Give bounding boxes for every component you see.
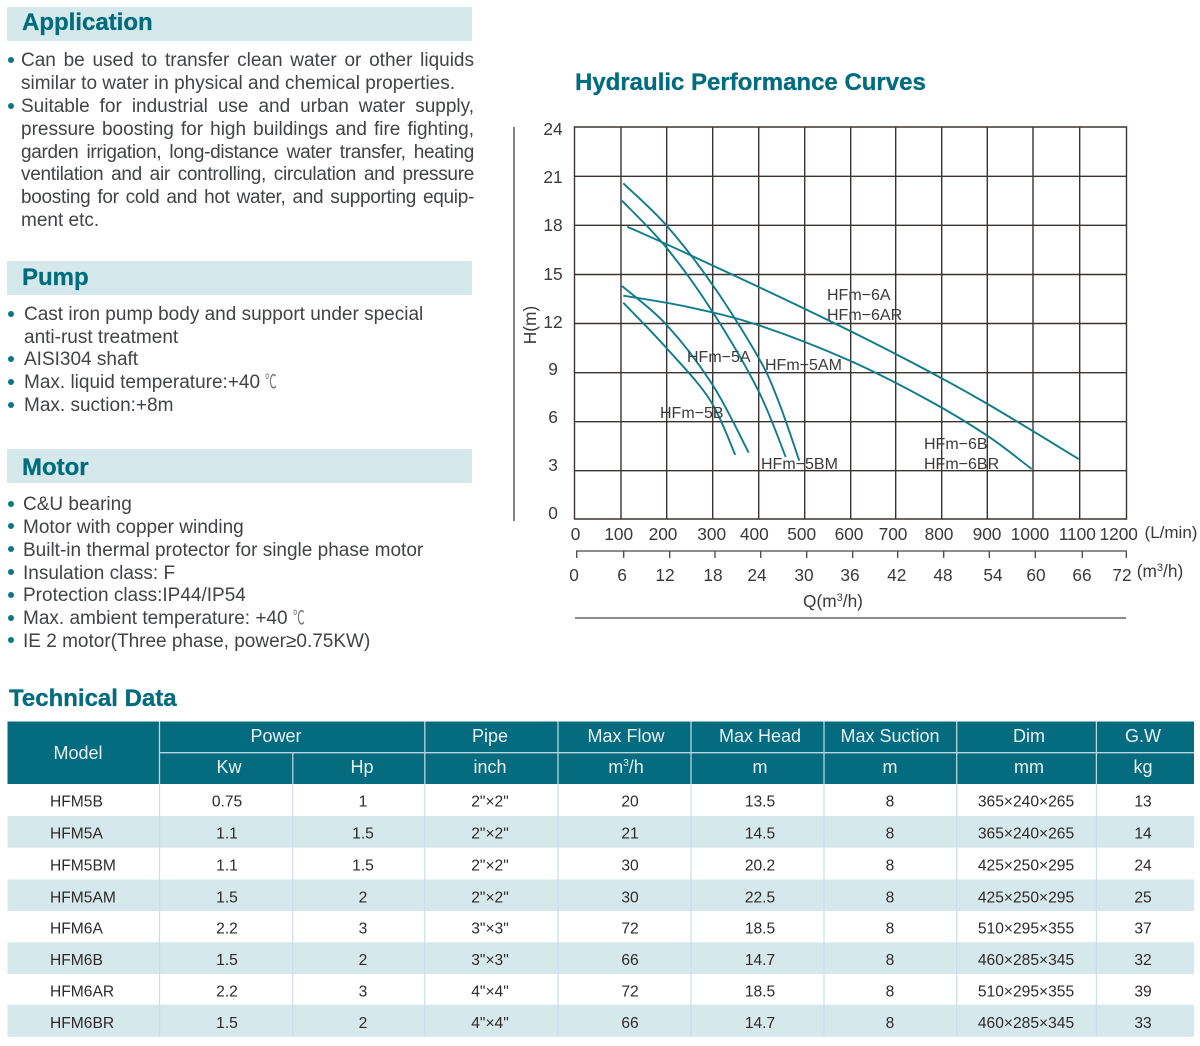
table header: inch (473, 757, 507, 777)
row HFM5AM: 2"×2" (471, 890, 509, 906)
motor bullet list: Max. ambient temperature: +40 (23, 608, 288, 629)
motor bullet list: Protection class:IP44/IP54 (23, 585, 246, 606)
x axis title: 3 (837, 592, 843, 604)
row HFM5A: 8 (886, 826, 894, 842)
table header: Model (53, 743, 103, 763)
application bullet list: similar to water in physical and chemical properties. (21, 73, 455, 94)
row HFM5BM: 8 (886, 858, 894, 874)
row HFM5B: 1 (359, 794, 367, 810)
application bullet list: Suitable for industrial use and urban water supply, (21, 96, 474, 117)
heading: Application: Application (22, 9, 153, 36)
row HFM5BM: 1.1 (216, 858, 238, 874)
x axis labels L/min: 900 (973, 524, 1001, 544)
row HFM5AM: 2 (359, 890, 367, 906)
motor bullet list: C&U bearing (23, 494, 132, 515)
row HFM6BR: 33 (1134, 1015, 1152, 1032)
application bullet list: boosting for cold and hot water, and supporting equip- (21, 187, 474, 208)
table header: Max Flow (587, 726, 666, 746)
y axis tick labels: 15 (543, 264, 563, 284)
row HFM5BM: 24 (1134, 858, 1152, 874)
heading: Hydraulic Performance Curves: Hydraulic Performance Curves (575, 69, 926, 96)
row HFM6A: HFM6A (50, 920, 103, 938)
table row stripes (8, 816, 1194, 1037)
row HFM5B (50, 794, 1152, 810)
row HFM6B: 14.7 (745, 952, 775, 969)
row HFM5BM: 20.2 (745, 858, 775, 874)
x axis title: /h) (843, 591, 863, 611)
row HFM6B: 8 (886, 952, 894, 969)
motor heading bar (7, 449, 472, 483)
x axis labels L/min: 300 (697, 524, 726, 544)
row HFM6B: 66 (621, 952, 639, 969)
table header: Max Suction (840, 726, 940, 746)
panel: application (7, 7, 474, 231)
row HFM6AR (50, 984, 1152, 1000)
row HFM5A: 2"×2" (471, 826, 509, 842)
row HFM5A: HFM5A (50, 826, 103, 842)
table header: m (752, 757, 768, 777)
x axis labels L/min: (L/min) (1145, 523, 1197, 542)
heading: Motor: Motor (22, 454, 89, 481)
table header: Kw (216, 757, 242, 777)
pump heading bar (7, 261, 472, 295)
x axis labels m3/h: 18 (703, 565, 723, 585)
y axis tick labels: 3 (548, 455, 558, 475)
pump bullet list: Max. suction:+8m (24, 395, 173, 416)
row HFM5BM (50, 858, 1152, 874)
curve labels (660, 287, 999, 473)
row HFM6A: 72 (621, 920, 639, 938)
table header: Hp (350, 757, 374, 777)
x axis labels L/min: 1000 (1011, 524, 1049, 544)
row HFM5A: 1.5 (352, 826, 374, 842)
x axis labels L/min (571, 523, 1197, 544)
x axis labels m3/h: 6 (617, 565, 627, 585)
y axis tick labels (543, 119, 563, 523)
table header: Pipe (472, 726, 508, 746)
row HFM5B: 13.5 (745, 794, 775, 810)
x axis labels L/min: 1200 (1099, 524, 1138, 544)
table header: Dim (1013, 726, 1045, 746)
row HFM6B: 32 (1134, 952, 1152, 969)
row HFM5AM: HFM5AM (50, 890, 116, 906)
row HFM5AM: 1.5 (216, 890, 238, 906)
y axis tick labels: 9 (548, 359, 558, 379)
row HFM5BM: 1.5 (352, 858, 374, 874)
x axis labels m3/h: 30 (794, 565, 814, 585)
row HFM5B: 8 (886, 794, 894, 810)
curve labels: HFm−5B (660, 405, 724, 422)
row HFM5BM: 425×250×295 (978, 858, 1074, 874)
row HFM6AR: 4"×4" (471, 984, 509, 1000)
motor bullet list: Motor with copper winding (23, 517, 244, 538)
curve labels: HFm−6AR (827, 307, 902, 324)
table header: 3 (623, 758, 629, 769)
row HFM5A: 21 (621, 826, 639, 842)
row HFM5AM: 30 (621, 890, 639, 906)
row HFM6B: 2 (359, 952, 367, 969)
motor bullet list: Built-in thermal protector for single phase motor (23, 540, 423, 561)
application bullet list (8, 50, 474, 231)
row HFM6AR: 8 (886, 984, 894, 1000)
row HFM5AM: 8 (886, 890, 894, 906)
pump bullet list: anti-rust treatment (24, 327, 178, 348)
y axis tick labels: 18 (543, 215, 563, 235)
x axis labels L/min: 800 (925, 524, 953, 544)
x axis labels m3/h: 36 (840, 565, 860, 585)
row HFM6BR: 1.5 (216, 1015, 238, 1032)
row HFM6BR: HFM6BR (50, 1015, 114, 1032)
curve labels: HFm−6BR (924, 456, 999, 473)
x axis labels L/min: 400 (740, 524, 769, 544)
x axis labels m3/h: /h) (1163, 561, 1183, 581)
x axis labels m3/h: 24 (747, 565, 767, 585)
x axis labels L/min: 600 (835, 524, 863, 544)
row HFM6BR: 460×285×345 (978, 1015, 1074, 1032)
row HFM5AM: 25 (1134, 890, 1152, 906)
y axis title: H(m) (520, 306, 540, 344)
curve labels: HFm−6B (924, 436, 988, 453)
row HFM5B: 0.75 (212, 794, 242, 810)
x axis labels m3/h: 0 (569, 565, 579, 585)
row HFM6A: 37 (1134, 920, 1152, 938)
application heading bar (7, 7, 472, 41)
table header (8, 722, 1194, 784)
heading: Pump: Pump (22, 264, 89, 291)
pump bullet list: ℃ (265, 372, 277, 393)
row HFM6BR: 4"×4" (471, 1015, 509, 1032)
x axis labels L/min: 700 (879, 524, 907, 544)
panel: pump (7, 261, 472, 416)
row HFM6AR: 3 (359, 984, 367, 1000)
table header: mm (1014, 757, 1044, 777)
pump bullet list (8, 304, 423, 416)
row HFM6A (50, 920, 1152, 938)
application bullet list: ventilation and air controlling, circulation and pressure (21, 164, 474, 185)
row HFM6AR: 510×295×355 (978, 984, 1074, 1000)
row HFM5A: 14.5 (745, 826, 775, 842)
row HFM5B: 2"×2" (471, 794, 509, 810)
x axis labels m3/h: 66 (1072, 565, 1092, 585)
curve labels: HFm−6A (827, 287, 891, 304)
x axis labels m3/h (569, 561, 1183, 585)
table header: Power (250, 726, 302, 746)
table header: /h (629, 757, 644, 777)
m3/h ruler (577, 551, 1126, 558)
x axis labels L/min: 100 (604, 524, 633, 544)
row HFM6AR: 2.2 (216, 984, 238, 1000)
row HFM6B: 1.5 (216, 952, 238, 969)
row HFM6A: 18.5 (745, 920, 775, 938)
x axis labels m3/h: 48 (933, 565, 953, 585)
y axis tick labels: 21 (543, 167, 563, 187)
x axis title: Q(m (803, 591, 837, 611)
row HFM6BR (50, 1015, 1152, 1032)
row HFM6BR: 66 (621, 1015, 639, 1032)
y axis tick labels: 0 (548, 503, 558, 523)
row HFM5AM (50, 890, 1152, 906)
row HFM5BM: 2"×2" (471, 858, 509, 874)
x axis labels m3/h: 54 (983, 565, 1003, 585)
row HFM6AR: 18.5 (745, 984, 775, 1000)
row HFM6A: 2.2 (216, 920, 238, 938)
row HFM5B: HFM5B (50, 794, 103, 810)
row HFM5BM: HFM5BM (50, 858, 116, 874)
row HFM6B: 460×285×345 (978, 952, 1074, 969)
row HFM6B: HFM6B (50, 952, 103, 969)
application bullet list: garden irrigation, long-distance water transfer, heating (21, 142, 474, 163)
performance curves (622, 183, 1079, 469)
row HFM5A: 365×240×265 (978, 826, 1074, 842)
row HFM6BR: 14.7 (745, 1015, 775, 1032)
motor bullet list: ℃ (293, 608, 305, 629)
x axis labels m3/h: 12 (655, 565, 675, 585)
pump bullet list: Max. liquid temperature:+40 (24, 372, 260, 393)
row HFM6BR: 8 (886, 1015, 894, 1032)
row HFM6AR: 72 (621, 984, 639, 1000)
row HFM5B: 20 (621, 794, 639, 810)
x axis labels L/min: 500 (787, 524, 816, 544)
table header: kg (1133, 757, 1153, 777)
row HFM5AM: 22.5 (745, 890, 775, 906)
row HFM5B: 365×240×265 (978, 794, 1074, 810)
x axis labels m3/h: 60 (1026, 565, 1046, 585)
x axis labels m3/h: 72 (1112, 565, 1132, 585)
pump bullet list: Cast iron pump body and support under special (24, 304, 423, 325)
panel: motor (7, 449, 472, 652)
application bullet list: pressure boosting for high buildings and fire fighting, (21, 119, 474, 140)
table header: G.W (1125, 726, 1161, 746)
pump bullet list: AISI304 shaft (24, 349, 138, 370)
row HFM6B: 3"×3" (471, 952, 509, 969)
curve labels: HFm−5BM (761, 456, 838, 473)
table header: Max Head (719, 726, 801, 746)
row HFM6BR: 2 (359, 1015, 367, 1032)
curve labels: HFm−5A (687, 349, 751, 366)
x axis labels m3/h: (m (1137, 561, 1157, 581)
row HFM6A: 3"×3" (471, 920, 509, 938)
x axis labels m3/h: 3 (1157, 562, 1163, 574)
application bullet list: Can be used to transfer clean water or other liquids (21, 50, 474, 71)
row HFM6AR: 39 (1134, 984, 1152, 1000)
heading: Technical Data: Technical Data (9, 685, 177, 712)
motor bullet list (8, 494, 423, 652)
table header: m (608, 757, 623, 777)
y axis tick labels: 6 (548, 407, 558, 427)
row HFM5A: 1.1 (216, 826, 238, 842)
row HFM5BM: 30 (621, 858, 639, 874)
row HFM6AR: HFM6AR (50, 984, 114, 1000)
y axis tick labels: 12 (543, 312, 563, 332)
x axis labels L/min: 0 (571, 524, 580, 544)
x axis labels L/min: 200 (649, 524, 677, 544)
row HFM5AM: 425×250×295 (978, 890, 1074, 906)
table header: m (882, 757, 898, 777)
motor bullet list: Insulation class: F (23, 563, 175, 584)
application bullet list: ment etc. (21, 210, 99, 231)
row HFM6A: 3 (359, 920, 367, 938)
motor bullet list: IE 2 motor(Three phase, power≥0.75KW) (23, 631, 370, 652)
x axis labels m3/h: 42 (887, 565, 906, 585)
row HFM6B (50, 952, 1152, 969)
row HFM5B: 13 (1134, 794, 1152, 810)
x axis labels L/min: 1100 (1059, 524, 1096, 544)
row HFM6A: 8 (886, 920, 894, 938)
y axis tick labels: 24 (543, 119, 563, 139)
row HFM5A: 14 (1134, 826, 1152, 842)
curve labels: HFm−5AM (765, 357, 842, 374)
row HFM5A (50, 826, 1152, 842)
row HFM6A: 510×295×355 (978, 920, 1074, 938)
